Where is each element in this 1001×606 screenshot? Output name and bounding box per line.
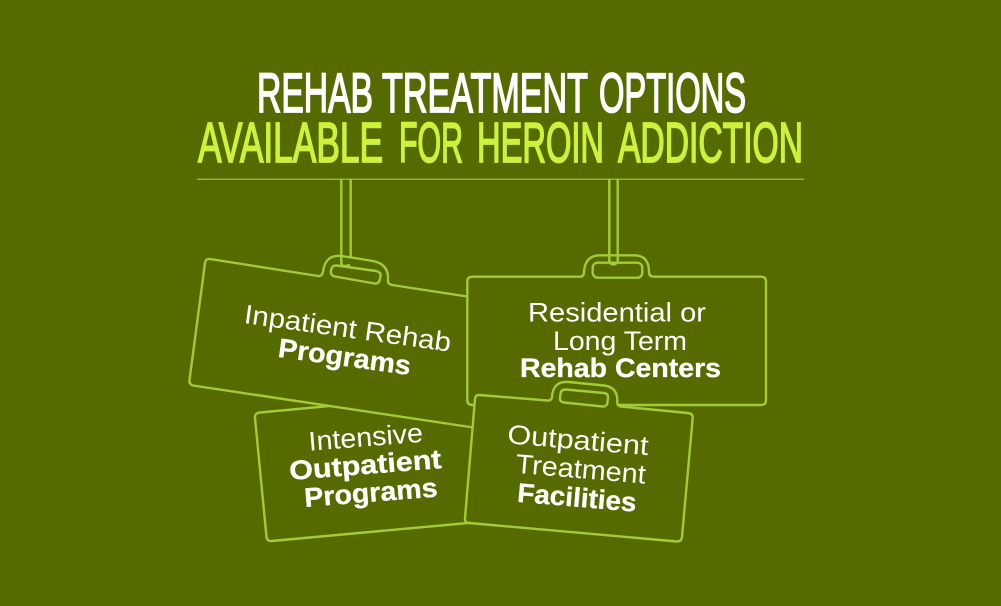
panel: residential or long term rehab centers [467, 179, 766, 405]
label: outpatient treatment facilities [506, 419, 650, 518]
label: outpatient treatment facilities: Treatment [514, 449, 648, 490]
icon: handle slot [560, 390, 608, 407]
title: HEROIN [477, 111, 604, 175]
icon: handle slot [331, 265, 381, 284]
label: intensive outpatient programs: Outpatient [288, 444, 443, 486]
label: outpatient treatment facilities: Outpatient [506, 419, 650, 461]
title: ADDICTION [618, 111, 803, 175]
label: intensive outpatient programs: Programs [303, 473, 439, 513]
label: residential or long term rehab centers: Residential or [528, 298, 706, 328]
panel: intensive outpatient programs [255, 391, 490, 541]
label: inpatient rehab programs: Programs [276, 333, 413, 381]
label: residential or long term rehab centers [520, 298, 721, 383]
panel: outpatient treatment facilities [465, 382, 693, 542]
icon: hanging strap [341, 179, 351, 266]
icon: hanging strap [609, 179, 618, 264]
label: residential or long term rehab centers: Rehab Centers [520, 353, 721, 383]
label: inpatient rehab programs: Inpatient Rehab [242, 299, 453, 358]
panel: inpatient rehab programs [189, 179, 490, 430]
title: TREATMENT [382, 61, 588, 124]
title: AVAILABLE [198, 111, 383, 175]
label: intensive outpatient programs [288, 418, 443, 513]
title: FOR [399, 111, 463, 175]
title: OPTIONS [599, 61, 746, 124]
label: residential or long term rehab centers: Long Term [553, 326, 687, 356]
label: outpatient treatment facilities: Facilities [516, 478, 638, 518]
title [198, 61, 803, 175]
icon: handle slot [593, 263, 642, 278]
label: inpatient rehab programs [242, 299, 453, 381]
label: intensive outpatient programs: Intensive [307, 418, 424, 457]
title: REHAB [257, 61, 373, 124]
